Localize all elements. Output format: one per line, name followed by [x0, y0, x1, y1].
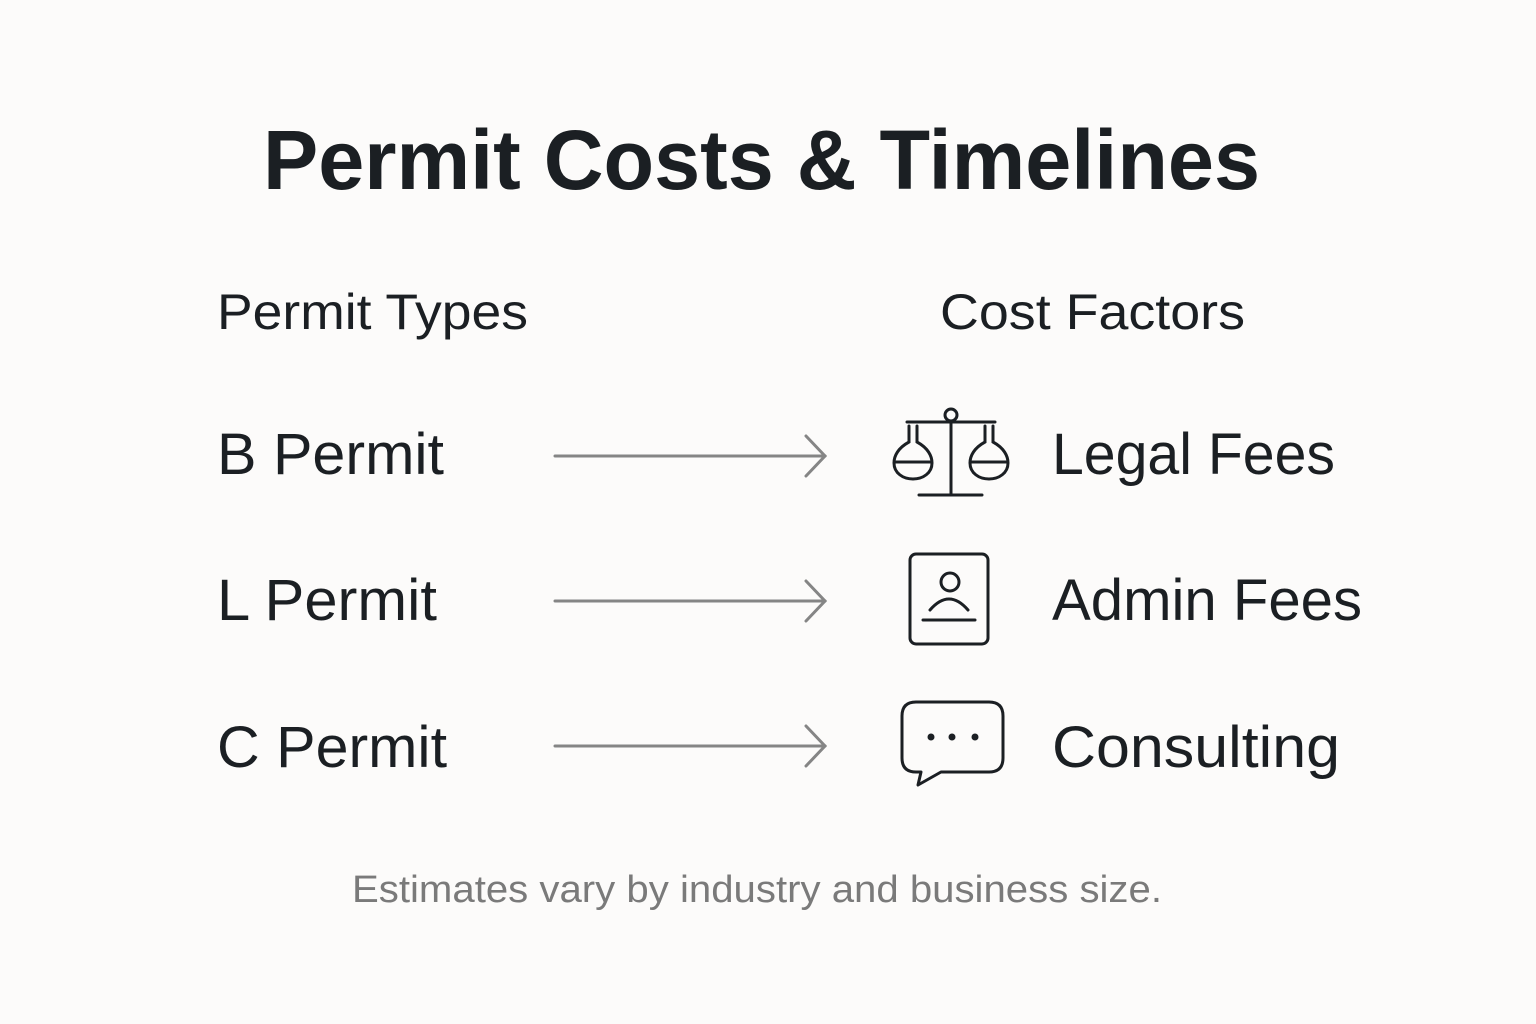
factor: legal fees: Legal Fees: [1052, 422, 1335, 487]
heading: permit types: Permit Types: [217, 284, 528, 340]
arrow 1: [555, 436, 825, 476]
heading: cost factors: Cost Factors: [940, 284, 1245, 340]
icon: speech bubble: [902, 702, 1003, 785]
icon: scales: [894, 409, 1008, 495]
permit: B: B Permit: [217, 422, 444, 487]
arrow 2: [555, 581, 825, 621]
permit: L: L Permit: [217, 568, 437, 633]
icon: admin badge: [910, 554, 988, 644]
arrow 3: [555, 726, 825, 766]
factor: admin fees: Admin Fees: [1052, 568, 1362, 633]
factor: consulting: Consulting: [1052, 715, 1340, 780]
permit: C: C Permit: [217, 715, 447, 780]
footnote: Estimates vary by industry and business size.: [352, 869, 1162, 911]
title: Permit Costs & Timelines: [263, 113, 1260, 207]
